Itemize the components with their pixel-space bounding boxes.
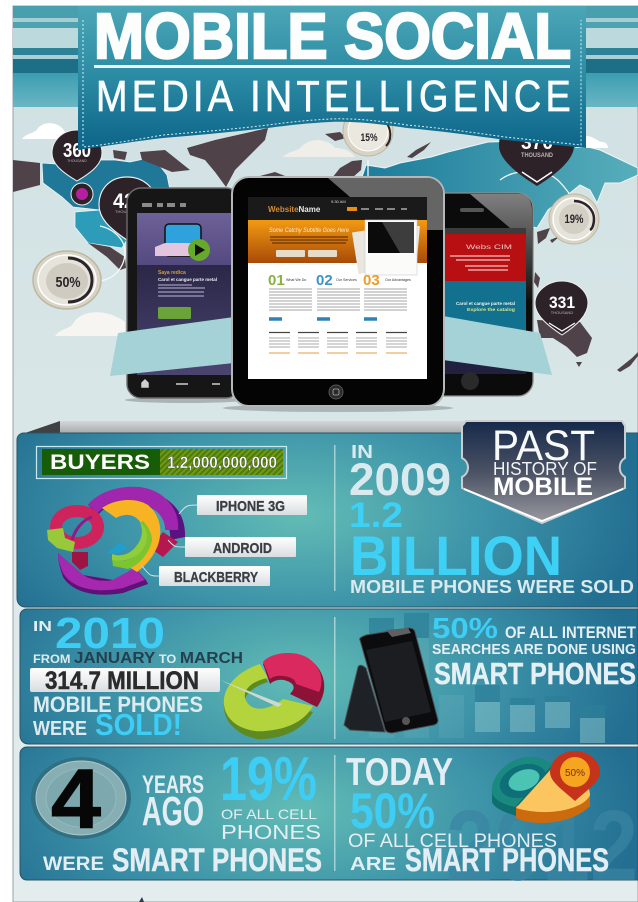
tablet read-more buttons	[269, 317, 377, 321]
tablet column headings	[286, 278, 411, 282]
map pin: 360 thousand: THOUSAND	[67, 159, 87, 163]
badge: 4 years: 4	[51, 752, 101, 846]
text: 50%: 50%	[350, 783, 435, 839]
map pin: 370 thousand: 370	[521, 132, 553, 154]
map pin: 370 thousand	[499, 108, 574, 186]
map: svalbard	[325, 132, 346, 141]
label: BlackBerry	[159, 566, 270, 586]
ring chart	[47, 487, 185, 595]
left phone status icons	[142, 203, 186, 207]
badge: past history of mobile: PAST	[492, 422, 595, 470]
label: Android: ANDROID	[213, 540, 272, 557]
left phone nav keys	[142, 380, 220, 387]
pie teal top	[492, 757, 552, 807]
tablet column copy	[269, 289, 407, 310]
label: Android	[185, 537, 296, 557]
text: were smart phones	[43, 842, 322, 878]
right phone speaker	[460, 208, 484, 212]
map: indonesia	[534, 272, 540, 288]
map: new zealand	[617, 352, 638, 372]
text: were smart phones: WERE	[43, 854, 104, 875]
map: greenland	[187, 128, 268, 187]
badge: past history of mobile	[462, 421, 625, 523]
panel divider	[334, 755, 336, 871]
text: were sold: WERE	[33, 718, 87, 740]
text: of all cell phones: OF ALL CELL PHONES	[348, 831, 557, 852]
badge: past history of mobile: MOBILE	[493, 473, 593, 501]
map: novaya zemlya	[407, 142, 431, 158]
title rule	[94, 65, 570, 68]
callout: 314.7 million: 314.7 MILLION	[45, 667, 199, 695]
pie orange slice	[516, 768, 590, 812]
right phone: Webs CIM	[466, 245, 512, 251]
gauge: 15%: 15%	[360, 132, 378, 144]
tablet column headings: What We Do	[286, 278, 306, 282]
pie chart with pin: 50%	[565, 768, 585, 779]
gauge: 50%	[33, 251, 101, 309]
map marker: purple dot	[71, 183, 93, 205]
pie teal centre	[506, 765, 542, 795]
donut green slice	[224, 664, 313, 731]
tablet column headings: Our Advantages	[385, 278, 411, 282]
right phone home button	[440, 360, 526, 374]
donut chart	[220, 653, 324, 739]
text: 1.2 billion: 1.2	[349, 496, 403, 535]
tablet home button	[329, 385, 343, 399]
gauge: 15%	[343, 106, 393, 156]
map: canada	[42, 157, 170, 212]
map pin: 370 thousand: THOUSAND	[521, 153, 554, 159]
pie teal slice	[492, 757, 552, 816]
label leaders	[142, 505, 197, 576]
label: BlackBerry: BLACKBERRY	[174, 569, 258, 586]
left phone copy: Saya redica	[158, 270, 186, 276]
donut shadow side	[224, 668, 313, 739]
crimson segment	[150, 532, 178, 557]
donut red depth	[263, 655, 324, 707]
tablet column numbers: 03	[363, 272, 380, 289]
buyers bar	[36, 446, 286, 478]
map: scandinavia	[332, 160, 362, 178]
title line 1: MOBILE SOCIAL	[94, 0, 571, 72]
tablet column numbers: 02	[316, 272, 333, 289]
left phone	[125, 188, 245, 403]
green inner arc	[112, 521, 152, 569]
tablet polaroids	[352, 220, 420, 275]
donut red slice	[263, 653, 321, 692]
tablet hero buttons	[276, 250, 337, 257]
text: were smart phones: SMART PHONES	[112, 842, 322, 878]
shelf strip	[25, 421, 480, 434]
map: japan and korea	[537, 228, 560, 244]
title banner	[78, 0, 586, 150]
tablet orange hero	[248, 220, 427, 263]
text: in 2010: IN	[33, 618, 52, 635]
map: australia	[537, 320, 592, 367]
label: iPhone 3G	[197, 495, 307, 515]
ribbon: right	[443, 316, 552, 375]
text: 1.2 billion: BILLION	[350, 524, 562, 587]
right phone: Explore the catalog	[467, 307, 515, 312]
text: years ago: YEARS	[142, 771, 204, 799]
map pin: 42 thousand	[99, 177, 157, 240]
map: mexico	[88, 243, 126, 270]
tablet: 9:30 AM	[331, 199, 346, 204]
world map	[13, 123, 638, 372]
right phone	[430, 193, 533, 396]
cloud: centre	[283, 140, 355, 157]
panel: 2009 sales	[17, 421, 638, 607]
tablet body	[248, 263, 427, 379]
buyers bar: BUYERS	[50, 451, 150, 474]
text: 50% of all internet	[432, 613, 637, 645]
cloud: top left	[22, 123, 73, 139]
badge: 4 years	[31, 752, 131, 846]
map pin: 42 thousand: 42	[113, 190, 135, 213]
text: in 2009: 2009	[349, 454, 451, 505]
text: 1.2 billion	[349, 496, 562, 587]
panel divider	[334, 617, 336, 739]
left phone: Carol et cangue parte metal	[158, 277, 217, 282]
green wedge	[47, 528, 75, 552]
right phone status bar	[440, 228, 526, 234]
panel: smart phone share	[20, 745, 638, 902]
background bar chart	[369, 613, 605, 743]
text: were sold: SOLD!	[95, 707, 182, 742]
connector lines	[100, 160, 574, 281]
tablet nav menu	[347, 207, 407, 211]
cloud: lower left	[55, 312, 125, 336]
title line 2: MEDIA INTELLIGENCE	[96, 71, 571, 121]
left phone screen	[137, 213, 237, 265]
map: alaska	[13, 160, 40, 192]
header stripes	[13, 6, 638, 107]
tablet column numbers: 01	[268, 272, 285, 289]
map: russia	[362, 140, 638, 228]
text: of all cell phones	[221, 806, 321, 844]
text: searches are done using: SEARCHES ARE DONE USING	[432, 642, 636, 658]
tablet: Some Catchy Subtitle Goes Here	[269, 227, 349, 234]
crimson chunk	[72, 552, 88, 570]
text: mobile phones were sold: MOBILE PHONES WERE SOLD	[350, 577, 634, 597]
yellow arc	[102, 500, 160, 572]
badge: past history of mobile: HISTORY OF	[493, 459, 597, 479]
gauge: 50%: 50%	[56, 274, 80, 291]
text: in 2010: 2010	[55, 609, 165, 658]
pin	[550, 751, 600, 801]
text: today: TODAY	[346, 751, 453, 794]
tablet footer columns	[269, 332, 407, 334]
ribbon: left	[110, 317, 234, 376]
map: arctic islands	[113, 150, 190, 172]
tablet: WebsiteName	[268, 205, 321, 214]
gauge: 19%	[549, 194, 599, 244]
cloud: top right	[575, 136, 608, 148]
text: were sold	[33, 707, 182, 742]
lower purple arc	[58, 553, 148, 595]
panel: 2010 sales	[20, 609, 638, 744]
buyers bar: 1.2,000,000,000	[167, 453, 277, 472]
tablet column headings: Our Services	[336, 278, 357, 282]
text: 19%: 19%	[220, 745, 317, 814]
map pin: 42 thousand: THOUSAND	[115, 209, 138, 214]
text: mobile phones: MOBILE PHONES	[33, 692, 203, 717]
map pin: 360 thousand: 360	[63, 140, 91, 162]
panel divider	[334, 445, 336, 591]
text: 50% of all internet: 50%	[432, 613, 498, 645]
tablet screen header	[248, 197, 427, 220]
text: are smart phones: ARE	[350, 854, 396, 874]
map pin: 331 thousand	[535, 281, 588, 335]
label: iPhone 3G: IPHONE 3G	[216, 498, 285, 515]
right phone: Carol et cangue parte metal	[456, 301, 515, 306]
text: from january to march: FROM JANUARY TO MARCH	[33, 650, 243, 667]
smartphones illustration	[344, 628, 438, 733]
map pin: 331 thousand: THOUSAND	[551, 310, 573, 315]
left phone button	[158, 307, 191, 319]
text: years ago: AGO	[142, 788, 204, 834]
pie chart with pin	[492, 751, 600, 823]
blue wedge	[107, 543, 128, 554]
tablet column numbers	[268, 272, 380, 289]
map: united states	[75, 205, 150, 248]
pie orange side	[516, 794, 590, 823]
text: in 2009: IN	[351, 442, 373, 462]
red spiral	[56, 511, 98, 543]
text: of all cell phones: OF ALL CELL	[221, 806, 317, 822]
right phone red hero	[440, 234, 526, 281]
tablet	[223, 177, 453, 412]
donut wedge	[220, 680, 282, 707]
bottom cut-off shape	[139, 897, 144, 902]
text: years ago	[142, 771, 204, 834]
pie teal ring	[495, 758, 551, 804]
upper purple arc	[88, 488, 185, 540]
text: of all cell phones: PHONES	[221, 822, 321, 844]
map pin: 331 thousand: 331	[549, 293, 575, 312]
right phone teal section	[440, 281, 526, 331]
gauge: 19%: 19%	[564, 212, 584, 226]
map: iceland	[260, 172, 285, 183]
map pin: 360 thousand	[52, 130, 102, 181]
left phone video icon	[155, 224, 210, 261]
